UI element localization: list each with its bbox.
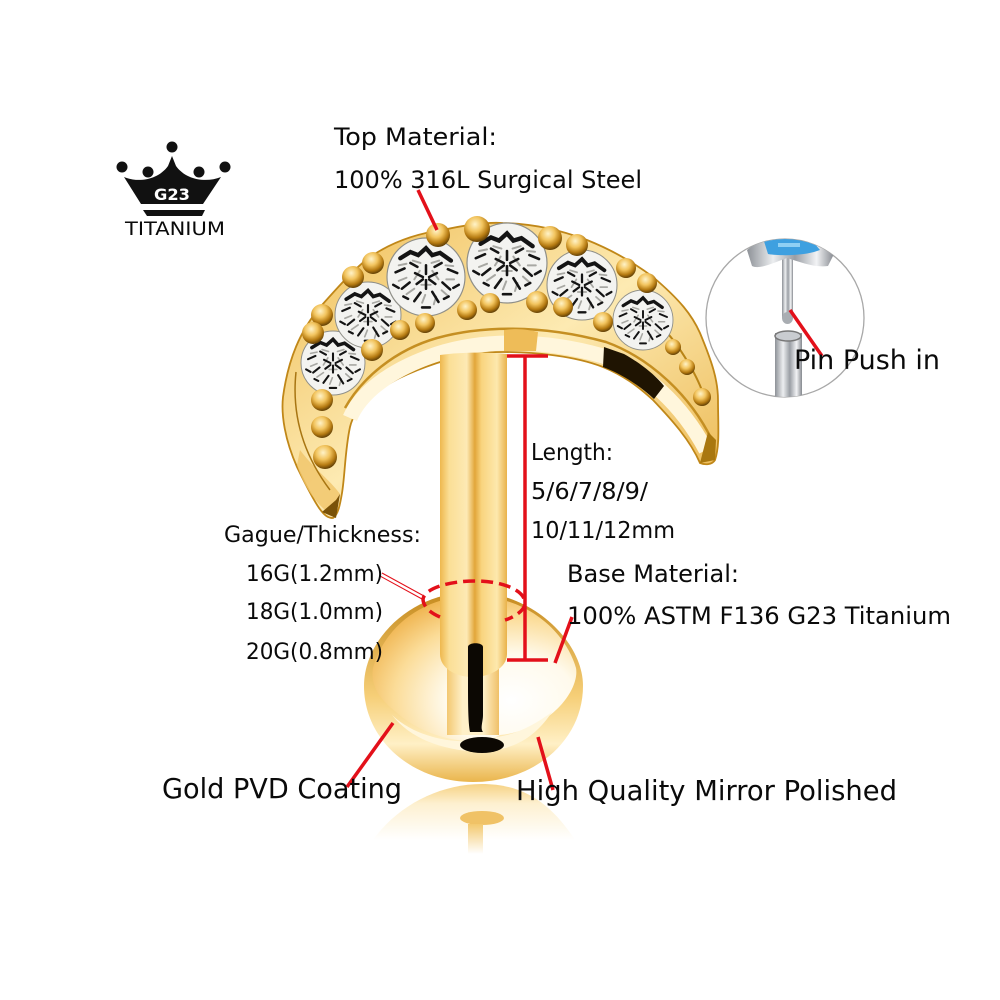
inset: pin push detail xyxy=(706,238,864,403)
label: length xyxy=(531,440,675,544)
label: base material: Base Material: xyxy=(567,560,739,588)
label: mirror polished: High Quality Mirror Polished xyxy=(516,774,897,807)
beads xyxy=(302,216,711,469)
label: base material xyxy=(567,560,951,630)
label: length: 5/6/7/8/9/ xyxy=(531,479,648,505)
red annotation lines xyxy=(347,190,822,790)
label: base material: 100% ASTM F136 G23 Titanium xyxy=(567,602,951,630)
icon: G23 titanium crown logo: TITANIUM xyxy=(124,218,225,240)
label: pin push in: Pin Push in xyxy=(794,345,940,376)
label: gauge thickness xyxy=(224,523,421,665)
red dashed gauge ring xyxy=(423,581,525,620)
icon: G23 titanium crown logo xyxy=(116,142,230,240)
base disc xyxy=(364,592,583,782)
stones xyxy=(301,223,673,395)
label: top material: 100% 316L Surgical Steel xyxy=(334,166,642,194)
label: gauge thickness: 16G(1.2mm) xyxy=(246,562,383,587)
shaft and pin xyxy=(440,353,507,753)
label: top material xyxy=(333,123,642,194)
label: gauge thickness: Gague/Thickness: xyxy=(224,523,421,548)
label: gauge thickness: 18G(1.0mm) xyxy=(246,600,383,625)
label: gauge thickness: 20G(0.8mm) xyxy=(246,640,383,665)
label: gold PVD coating: Gold PVD Coating xyxy=(162,772,402,805)
label: length: 10/11/12mm xyxy=(531,518,675,544)
label: top material: Top Material: xyxy=(333,123,497,151)
infographic canvas xyxy=(116,126,949,852)
reflection of base xyxy=(373,784,575,854)
label: length: Length: xyxy=(531,440,613,466)
icon: G23 titanium crown logo: G23 xyxy=(154,185,190,204)
moon crescent top xyxy=(283,216,718,518)
